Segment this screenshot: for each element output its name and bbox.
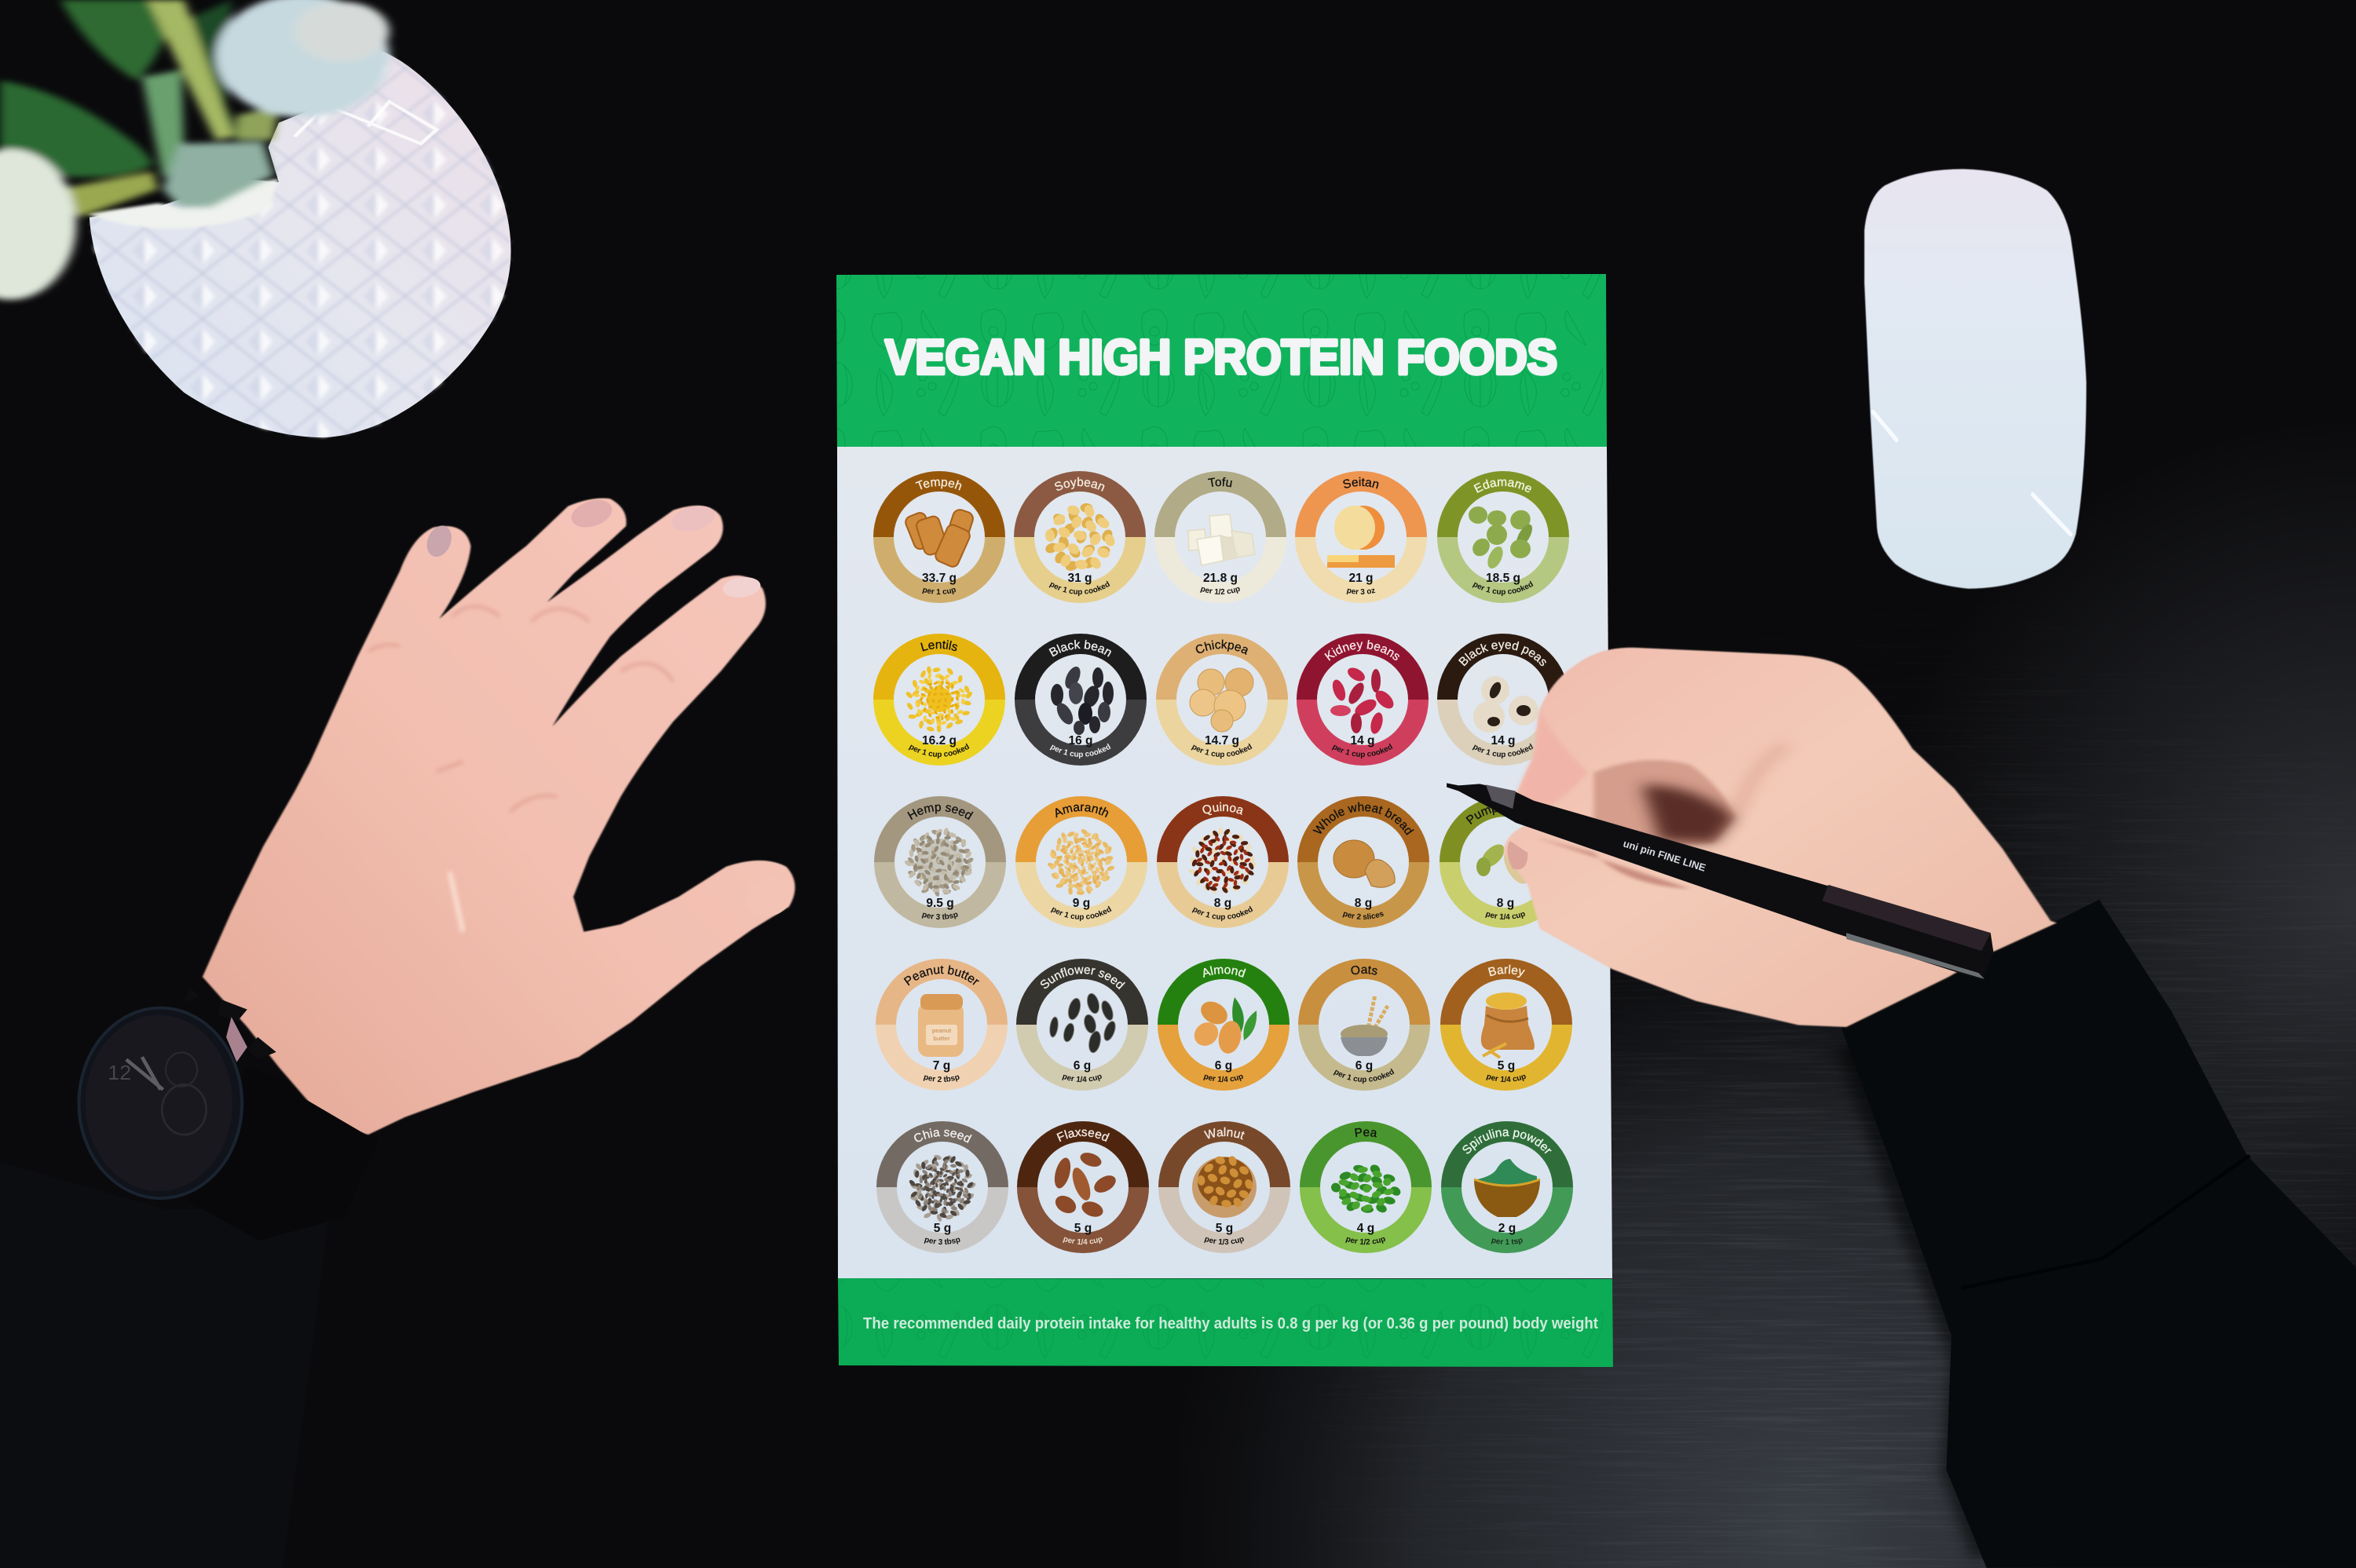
- badge: Peanut butter: [876, 959, 1008, 1091]
- watch: 12: [108, 1062, 131, 1084]
- badge: Kidney beans: 14 g: [1350, 734, 1375, 747]
- badge: Quinoa: Quinoa: [1201, 801, 1246, 818]
- vase: [87, 51, 511, 437]
- flowers and leaves: [0, 0, 390, 300]
- badge: Kidney beans: [1297, 634, 1429, 766]
- icon: edamame: [1469, 506, 1535, 571]
- badge: Almond: 6 g: [1215, 1059, 1232, 1073]
- badge: Sunflower seed: [1016, 959, 1148, 1091]
- icon: hemp seeds: [893, 817, 986, 909]
- right sleeve: [1842, 900, 2356, 1568]
- badge: Spirulina powder: Spirulina powder: [1460, 1126, 1554, 1157]
- badge: Pea: Pea: [1354, 1126, 1378, 1140]
- badge: Seitan: [1295, 471, 1427, 603]
- badge: Chickpea: Chickpea: [1194, 638, 1251, 658]
- left hand: [203, 495, 799, 1135]
- badge: Almond: Almond: [1200, 963, 1247, 981]
- badge: Flaxseed: per 1/4 cup: [1062, 1235, 1104, 1247]
- badge: Pea: 4 g: [1357, 1222, 1374, 1235]
- badge: Seitan: Seitan: [1343, 477, 1379, 488]
- badge: Walnut: [1158, 1121, 1290, 1253]
- pen: [1447, 783, 1994, 980]
- badge: Pumpkin seed: per 1/4 cup: [1484, 910, 1527, 922]
- badge: Peanut butter: per 2 tbsp: [923, 1073, 960, 1084]
- badge: Black bean: Black bean: [1047, 638, 1114, 660]
- badge: Chickpea: 14.7 g: [1205, 734, 1239, 747]
- badge: Hemp seed: per 3 tbsp: [921, 911, 959, 922]
- icon: chickpeas: [1190, 668, 1253, 732]
- badge: Chickpea: [1156, 634, 1288, 766]
- icon: oats bowl: [1341, 995, 1388, 1056]
- badge: Edamame: 18.5 g: [1486, 572, 1520, 585]
- badge: Edamame: [1437, 471, 1569, 603]
- badge: Pea: [1300, 1121, 1432, 1253]
- icon: quinoa: [1174, 815, 1271, 911]
- badge: Whole wheat bread: [1297, 796, 1429, 928]
- icon: soybeans: [1041, 497, 1119, 579]
- badge: Edamame: per 1 cup cooked: [1472, 581, 1533, 597]
- badge: Seitan: 21 g: [1348, 572, 1374, 585]
- badge: Spirulina powder: per 1 tsp: [1491, 1236, 1524, 1247]
- badge: Quinoa: 8 g: [1214, 897, 1231, 910]
- watch strap: [188, 1068, 377, 1241]
- badge: Flaxseed: Flaxseed: [1055, 1126, 1111, 1145]
- badge: Tofu: Tofu: [1208, 477, 1232, 487]
- badge: Lentils: 16.2 g: [922, 734, 957, 747]
- vase with flowers: [0, 0, 511, 437]
- badge: Whole wheat bread: Whole wheat bread: [1312, 801, 1416, 838]
- badge: Soybean: 31 g: [1067, 572, 1092, 585]
- icon: lentils: [893, 654, 986, 747]
- badge: Barley: Barley: [1487, 963, 1526, 979]
- badge: Seitan: per 3 oz: [1346, 589, 1376, 595]
- badge: Peanut butter: 7 g: [933, 1059, 950, 1073]
- badge: Chia seed: Chia seed: [912, 1126, 973, 1146]
- icon: almonds: [1190, 997, 1257, 1055]
- badge: Black eyed peas: Black eyed peas: [1457, 638, 1550, 669]
- badge: Quinoa: [1157, 796, 1289, 928]
- badge: Lentils: per 1 cup cooked: [908, 743, 969, 758]
- badge: Tofu: 21.8 g: [1203, 572, 1238, 585]
- badge: Almond: [1158, 959, 1290, 1091]
- icon: chia seeds: [900, 1146, 983, 1230]
- icon: black beans: [1051, 664, 1114, 735]
- icon: peanut butter jar: peanut: [932, 1027, 952, 1034]
- badge: Oats: per 1 cup cooked: [1332, 1068, 1396, 1084]
- badge: Barley: per 1/4 cup: [1485, 1073, 1527, 1084]
- badge: Pumpkin seed: 8 g: [1497, 897, 1514, 910]
- badge: Chia seed: [876, 1121, 1008, 1253]
- badge: Tofu: per 1/2 cup: [1200, 587, 1240, 595]
- paper body: [837, 447, 1612, 1278]
- badge: Spirulina powder: [1441, 1121, 1573, 1253]
- badge: Whole wheat bread: per 2 slices: [1341, 909, 1385, 922]
- badge: Quinoa: per 1 cup cooked: [1191, 905, 1255, 922]
- badge: Oats: [1298, 959, 1430, 1091]
- badge: Amaranth: 9 g: [1073, 897, 1090, 910]
- badge: Barley: 5 g: [1498, 1059, 1515, 1073]
- poster: [836, 274, 1613, 1367]
- watch: [79, 987, 379, 1223]
- badge: Black bean: 16 g: [1068, 734, 1093, 747]
- badge: Black bean: [1015, 634, 1147, 766]
- badge: Pea: per 1/2 cup: [1344, 1235, 1387, 1247]
- badge: Amaranth: [1015, 796, 1147, 928]
- icon: bread: [1333, 840, 1395, 887]
- badge: Pumpkin seed: Pumpkin seed: [1464, 801, 1547, 828]
- icon: walnut: [1192, 1155, 1257, 1218]
- icon: amaranth: [1040, 821, 1123, 905]
- badge: Tempeh: per 1 cup: [922, 587, 956, 595]
- badge: Walnut: 5 g: [1216, 1222, 1233, 1235]
- icon: black eyed peas: [1473, 676, 1538, 733]
- badge: Edamame: Edamame: [1473, 479, 1531, 493]
- badge: Walnut: per 1/3 cup: [1203, 1235, 1246, 1247]
- badge: Chia seed: 5 g: [934, 1222, 951, 1235]
- badge: Peanut butter: Peanut butter: [902, 963, 982, 989]
- badge: Black eyed peas: 14 g: [1491, 734, 1516, 747]
- badge: Tempeh: Tempeh: [916, 479, 961, 490]
- icon: barley sack: [1481, 992, 1535, 1058]
- table background: [1260, 511, 2356, 1568]
- title: VEGAN HIGH PROTEIN FOODS: [885, 331, 1557, 385]
- footer band: [838, 1278, 1613, 1367]
- badge: Sunflower seed: per 1/4 cup: [1061, 1073, 1103, 1084]
- icon: spirulina bowl: [1474, 1159, 1540, 1217]
- badge: Soybean: Soybean: [1055, 477, 1104, 492]
- badge: Tofu: [1154, 471, 1286, 603]
- icon: pumpkin seeds: [1476, 840, 1534, 888]
- badge: Oats: Oats: [1350, 963, 1379, 978]
- badge: Barley: [1440, 959, 1572, 1091]
- left sleeve: [0, 1162, 330, 1568]
- icon: tempeh: [904, 508, 975, 568]
- badge: Spirulina powder: 2 g: [1498, 1222, 1516, 1235]
- icon: sunflower seeds: [1048, 992, 1118, 1054]
- icon: tofu cubes: [1188, 514, 1255, 565]
- right hand: [1504, 648, 2057, 1027]
- icon: kidney beans: [1330, 665, 1397, 735]
- badge: Soybean: per 1 cup cooked: [1049, 581, 1110, 597]
- badge: Almond: per 1/4 cup: [1202, 1073, 1245, 1084]
- badge: Hemp seed: 9.5 g: [926, 897, 954, 910]
- badge: Flaxseed: 5 g: [1074, 1222, 1092, 1235]
- computer mouse: [1864, 169, 2087, 589]
- icon: flaxseeds: [1052, 1150, 1118, 1219]
- badge: Amaranth: Amaranth: [1052, 801, 1111, 821]
- footer note: The recommended daily protein intake for healthy adults is 0.8 g per kg (or 0.36 g per pound) body weight: [863, 1315, 1598, 1332]
- icon: peanut butter jar: butter: [933, 1035, 950, 1042]
- badge: Lentils: [873, 634, 1005, 766]
- badge: Kidney beans: Kidney beans: [1323, 638, 1403, 664]
- badge: Black bean: per 1 cup cooked: [1048, 743, 1113, 759]
- badge: Soybean: [1014, 471, 1146, 603]
- icon: seitan: [1327, 506, 1395, 568]
- badge: Sunflower seed: 6 g: [1074, 1059, 1091, 1073]
- badge: Hemp seed: [874, 796, 1006, 928]
- badge: Sunflower seed: Sunflower seed: [1037, 963, 1127, 992]
- badge: Whole wheat bread: 8 g: [1355, 897, 1372, 910]
- badge: Oats: 6 g: [1355, 1059, 1373, 1073]
- pen brand text: uni pin FINE LINE: [1622, 838, 1707, 874]
- badge: Black eyed peas: per 1 cup cooked: [1471, 743, 1535, 759]
- badge: Tempeh: 33.7 g: [922, 572, 957, 585]
- badge: Flaxseed: [1017, 1121, 1149, 1253]
- badge: Black eyed peas: [1437, 634, 1569, 766]
- badge: Walnut: Walnut: [1203, 1126, 1246, 1142]
- nails: [423, 495, 799, 923]
- badge: Hemp seed: Hemp seed: [905, 801, 975, 823]
- badge: Kidney beans: per 1 cup cooked: [1330, 743, 1395, 759]
- badge: Chickpea: per 1 cup cooked: [1190, 743, 1254, 759]
- icon: peanut butter jar: [918, 994, 964, 1057]
- badge: Pumpkin seed: [1440, 796, 1571, 928]
- header band: [836, 274, 1607, 447]
- icon: peas: [1330, 1163, 1403, 1215]
- badge: Amaranth: per 1 cup cooked: [1049, 905, 1114, 922]
- badge: Tempeh: [873, 471, 1005, 603]
- badge: Chia seed: per 3 tbsp: [924, 1236, 961, 1247]
- badge: Lentils: Lentils: [920, 640, 958, 652]
